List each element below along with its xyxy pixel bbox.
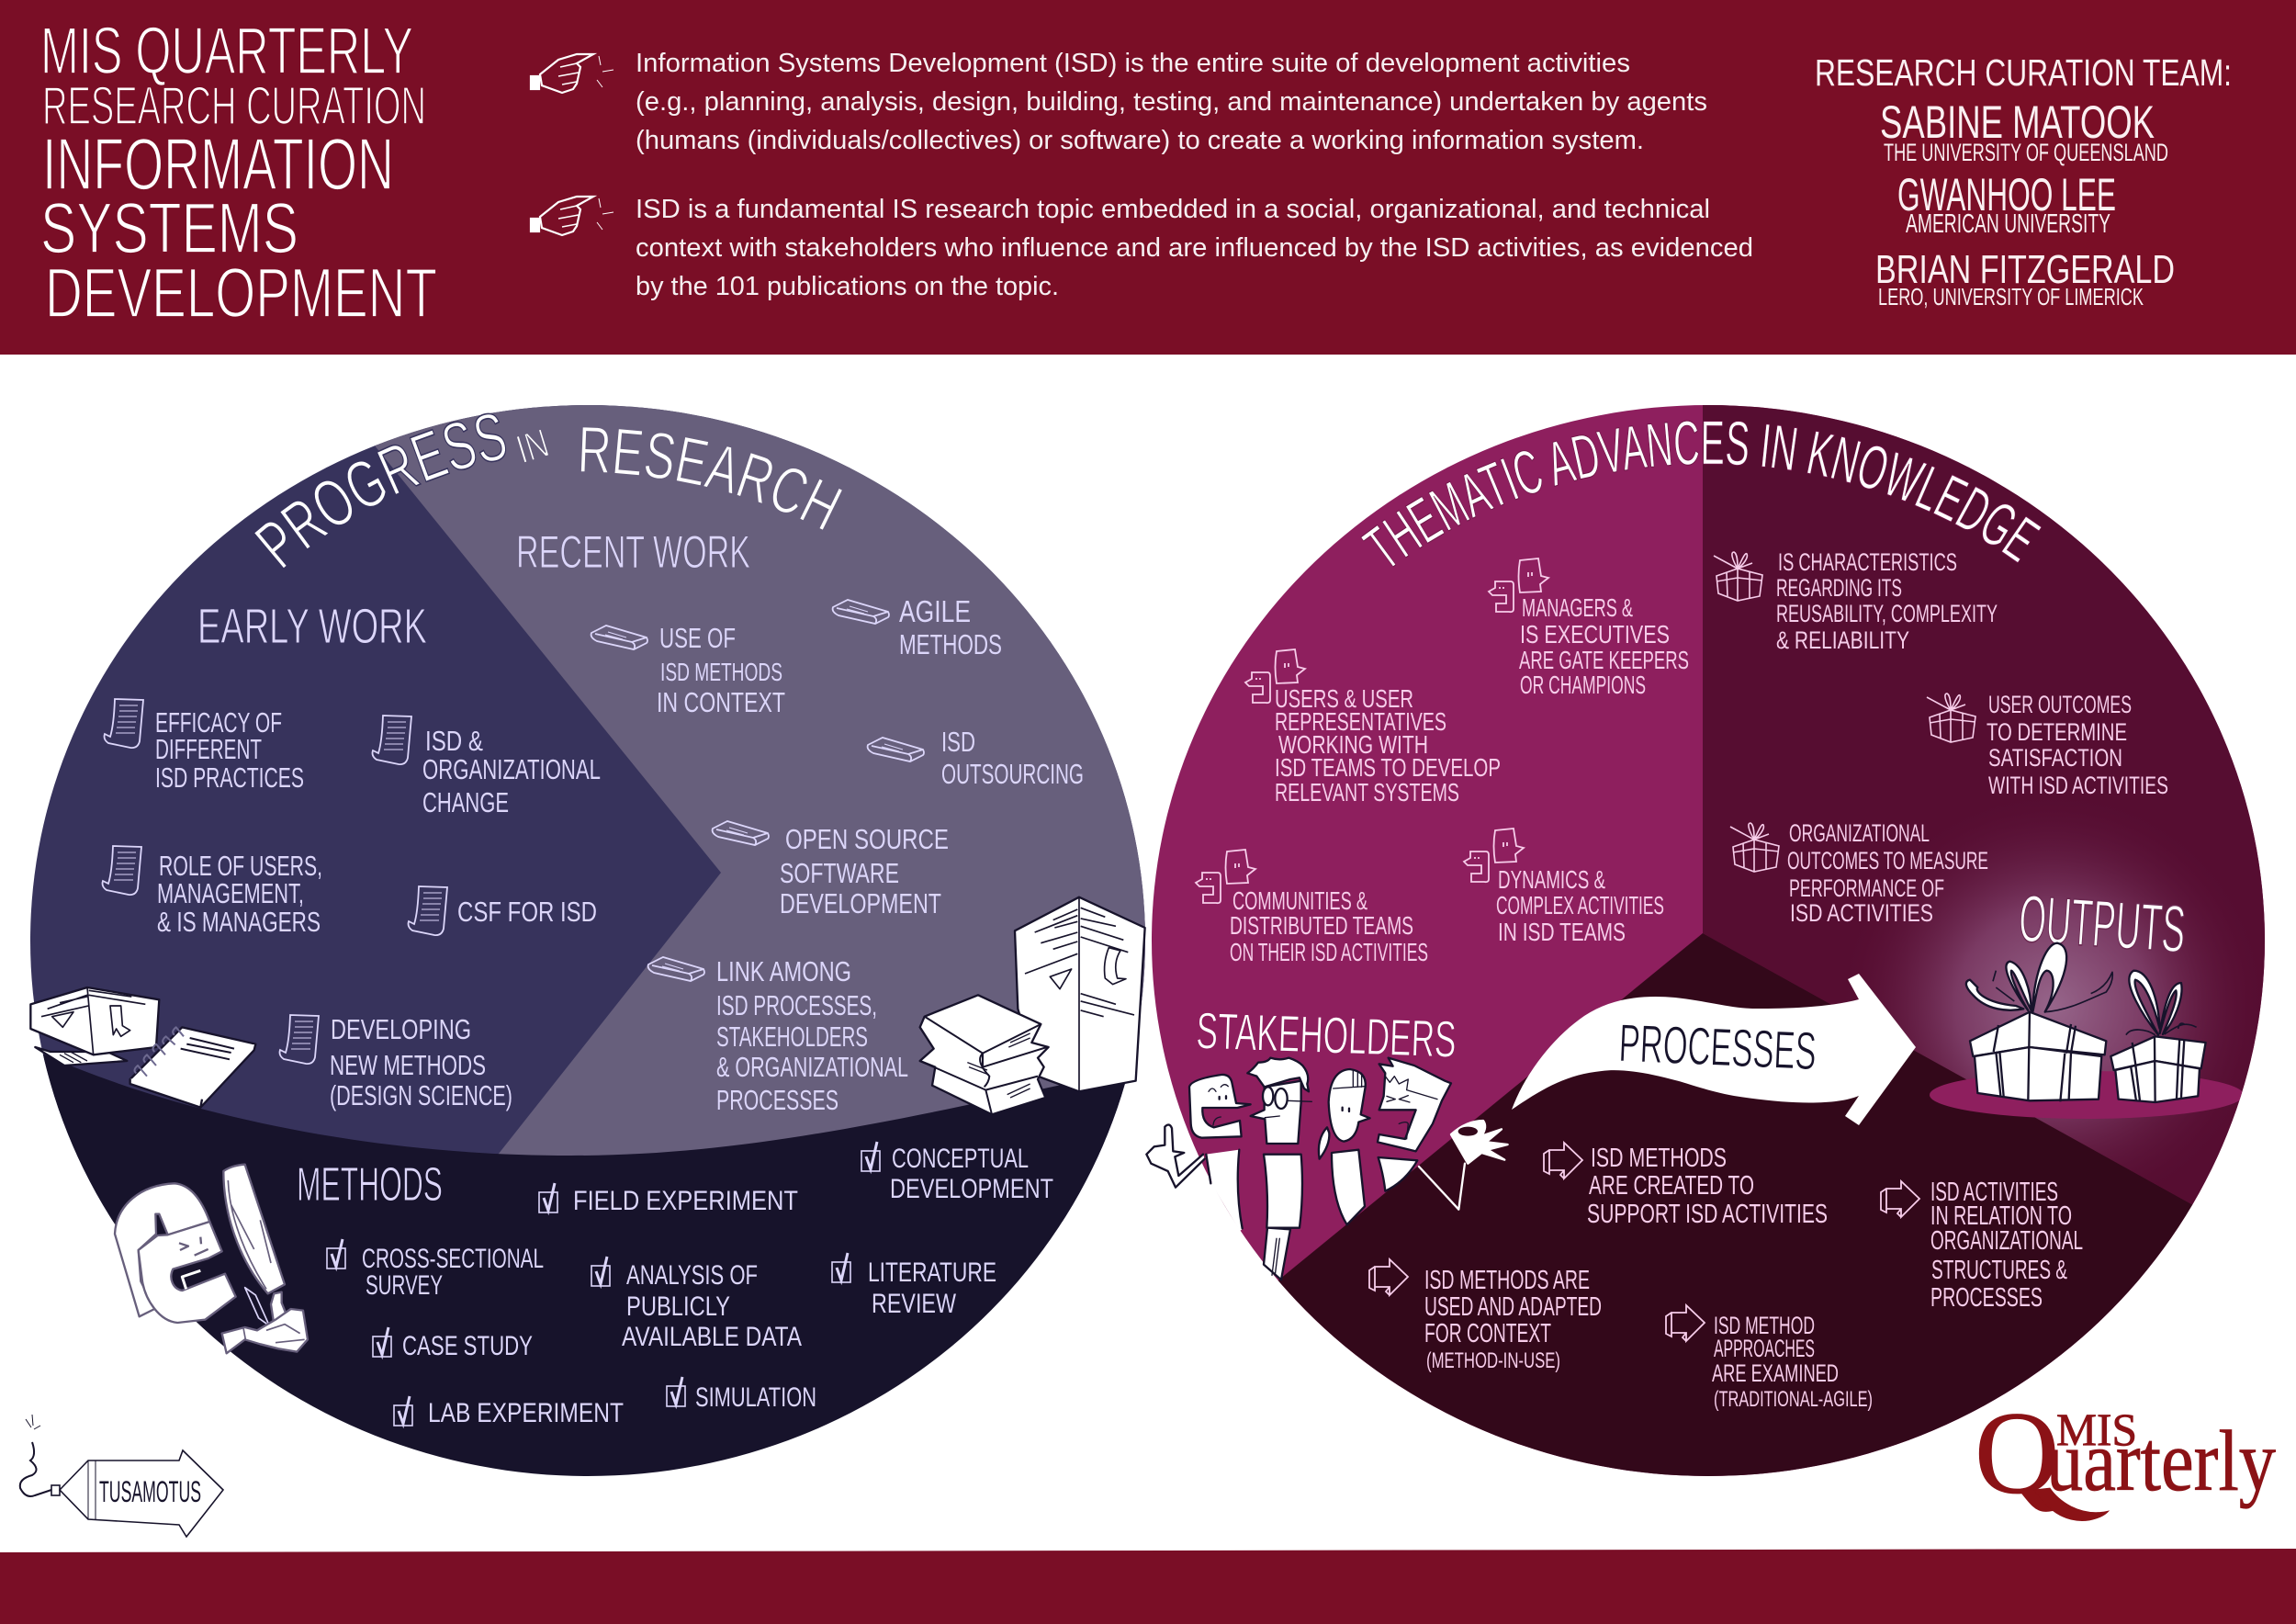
research curation team: LERO, UNIVERSITY OF LIMERICK	[1878, 283, 2144, 310]
logo: mis quarterly	[1975, 1388, 2276, 1521]
method: literature review	[868, 1257, 996, 1319]
item: outsourcing	[941, 726, 1084, 790]
item: efficacy: EFFICACY OF	[155, 706, 282, 739]
item: users: REPRESENTATIVES	[1275, 707, 1446, 736]
research curation team: GWANHOO LEE	[1897, 169, 2116, 220]
item: isd activities	[1930, 1178, 2083, 1313]
title: INFORMATION	[42, 123, 394, 205]
item: user outcomes: WITH ISD ACTIVITIES	[1988, 772, 2168, 799]
method: lab experiment: LAB EXPERIMENT	[428, 1398, 624, 1428]
item: open source: DEVELOPMENT	[780, 887, 941, 919]
item: user outcomes: TO DETERMINE	[1986, 718, 2127, 746]
item: organizational change	[422, 725, 601, 818]
heading: stakeholders: STAKEHOLDERS	[1196, 1001, 1458, 1068]
item: developing new methods: DEVELOPING	[331, 1013, 471, 1045]
item: method approaches: ISD METHOD	[1714, 1312, 1815, 1339]
item: role of users	[157, 850, 322, 938]
method: analysis of public data	[622, 1260, 802, 1352]
icon: checkbox	[861, 1142, 880, 1171]
context paragraph: ISD is a fundamental IS research topic embedded in a social, organizational, and technical	[636, 195, 1710, 224]
outputs glow	[1885, 838, 2221, 1161]
recent work sector	[358, 395, 1157, 1180]
circle heading: progress in research: PROGRESS	[254, 413, 507, 568]
item: organizational change: ISD &	[425, 725, 483, 757]
context paragraph: context with stakeholders who influence and are influenced by the ISD activities, as evidenced	[636, 233, 1753, 263]
item: is characteristics: & RELIABILITY	[1776, 626, 1909, 654]
icon: arrow	[1881, 1181, 1919, 1217]
method: analysis of public data: ANALYSIS OF	[626, 1260, 758, 1291]
item: organizational outcomes: OUTCOMES TO MEASURE	[1787, 847, 1988, 874]
item: dynamics: DYNAMICS &	[1498, 865, 1605, 894]
heading: thematic advances in knowledge: THEMATIC ADVANCES IN KNOWLEDGE	[1360, 421, 2043, 568]
stakeholders sector	[1148, 395, 2278, 1488]
icon: book	[713, 821, 769, 845]
heading: early work: EARLY WORK	[197, 599, 427, 654]
item: isd activities: ORGANIZATIONAL	[1930, 1226, 2083, 1256]
item: developing new methods	[330, 1013, 512, 1111]
item: methods created: ISD METHODS	[1591, 1144, 1727, 1173]
icon: paper	[373, 716, 411, 764]
title	[40, 15, 437, 333]
title: DEVELOPMENT	[45, 254, 437, 333]
item: developing new methods: NEW METHODS	[330, 1049, 486, 1081]
title: RESEARCH CURATION	[42, 76, 426, 136]
illustration: tusamotus tube	[20, 1415, 223, 1537]
item: methods used: ISD METHODS ARE	[1424, 1266, 1590, 1295]
item: method approaches	[1712, 1312, 1873, 1412]
item: organizational outcomes: ISD ACTIVITIES	[1790, 899, 1933, 927]
definition paragraph: Information Systems Development (ISD) is the entire suite of development activities	[636, 49, 1630, 78]
item: role of users: ROLE OF USERS,	[159, 850, 322, 882]
icon: pointing hand 2	[531, 197, 613, 235]
context paragraph: by the 101 publications on the topic.	[636, 272, 1059, 301]
title: SYSTEMS	[40, 187, 298, 268]
item: outsourcing: ISD	[941, 726, 975, 758]
circle heading: progress in research: RESEARCH	[580, 427, 842, 529]
research curation team: BRIAN FITZGERALD	[1875, 247, 2175, 292]
item: methods created: ARE CREATED TO	[1589, 1171, 1754, 1201]
item: isd activities: PROCESSES	[1930, 1283, 2043, 1313]
item: organizational outcomes: ORGANIZATIONAL	[1789, 819, 1930, 847]
item: methods used: (METHOD-IN-USE)	[1426, 1348, 1560, 1373]
process items	[1369, 1143, 2083, 1412]
item: use of isd methods	[657, 622, 785, 718]
icon: book	[868, 738, 924, 761]
icon: paper	[105, 699, 143, 748]
item: isd activities: ISD ACTIVITIES	[1930, 1178, 2058, 1207]
item: outsourcing: OUTSOURCING	[941, 758, 1084, 790]
item: users	[1275, 684, 1501, 806]
item: efficacy: ISD PRACTICES	[155, 761, 304, 794]
heading: recent work: RECENT WORK	[516, 526, 750, 578]
item: user outcomes: SATISFACTION	[1988, 744, 2122, 772]
panel: progress in research circle	[18, 395, 1157, 1488]
method: conceptual development: CONCEPTUAL	[892, 1144, 1029, 1174]
icon: arrow	[1544, 1143, 1582, 1179]
outputs sector	[1703, 395, 2278, 1252]
item: managers: MANAGERS &	[1522, 593, 1633, 622]
item: method approaches: APPROACHES	[1714, 1335, 1815, 1362]
item: isd activities: IN RELATION TO	[1930, 1201, 2072, 1231]
item: communities: COMMUNITIES &	[1232, 886, 1367, 915]
item: methods used: USED AND ADAPTED	[1424, 1292, 1602, 1322]
method: analysis of public data: AVAILABLE DATA	[622, 1322, 802, 1352]
icon: people	[1464, 829, 1524, 882]
icon: people	[1196, 850, 1255, 903]
early work items	[103, 699, 601, 1111]
item: agile methods: AGILE	[899, 594, 971, 628]
method: cross-sectional survey	[362, 1244, 544, 1301]
icon: paper	[279, 1015, 319, 1064]
item: developing new methods: (DESIGN SCIENCE)	[330, 1079, 512, 1111]
item: communities	[1230, 886, 1428, 966]
icon: people	[1489, 558, 1548, 612]
methods sector	[18, 1047, 1157, 1488]
icon: checkbox	[539, 1183, 557, 1212]
item: agile methods: METHODS	[899, 628, 1002, 660]
stakeholder items	[1196, 558, 1689, 966]
item: use of isd methods: IN CONTEXT	[657, 686, 785, 718]
item: users: WORKING WITH	[1278, 730, 1428, 759]
logo: mis quarterly: Q	[1975, 1388, 2059, 1518]
icon: paper	[408, 886, 447, 935]
item: use of isd methods: ISD METHODS	[660, 658, 782, 686]
item: managers: OR CHAMPIONS	[1520, 671, 1646, 699]
header band	[0, 0, 2296, 355]
processes sector	[1278, 933, 2193, 1476]
item: efficacy	[155, 706, 304, 794]
icon: checkbox	[394, 1396, 412, 1426]
recent work items	[591, 594, 1084, 1116]
item: communities: ON THEIR ISD ACTIVITIES	[1230, 938, 1428, 966]
definition paragraph: (e.g., planning, analysis, design, building, testing, and maintenance) undertaken by agents	[636, 87, 1707, 117]
item: user outcomes: USER OUTCOMES	[1988, 691, 2132, 718]
icon: checkbox	[832, 1253, 850, 1282]
research curation team	[1815, 51, 2232, 310]
icon: book	[648, 957, 704, 981]
icon: arrow	[1369, 1259, 1408, 1295]
method: conceptual development: DEVELOPMENT	[890, 1174, 1053, 1204]
research curation team: AMERICAN UNIVERSITY	[1906, 209, 2110, 239]
item: dynamics: COMPLEX ACTIVITIES	[1496, 891, 1664, 919]
item: role of users: MANAGEMENT,	[157, 877, 304, 909]
icon: book	[833, 600, 889, 624]
item: open source: SOFTWARE	[780, 857, 899, 889]
icon: gift	[1714, 552, 1762, 601]
illustration: gifts	[1966, 943, 2206, 1102]
definition paragraph: (humans (individuals/collectives) or software) to create a working information system.	[636, 126, 1644, 155]
item: organizational change: ORGANIZATIONAL	[422, 753, 601, 785]
research curation team: THE UNIVERSITY OF QUEENSLAND	[1884, 139, 2168, 166]
icon: checkbox	[373, 1327, 391, 1357]
icon: checkbox	[667, 1377, 685, 1406]
illustration: person with magnifying glass	[115, 1165, 308, 1353]
icon: people	[1245, 649, 1305, 703]
item: role of users: & IS MANAGERS	[157, 906, 321, 938]
panel: thematic advances circle	[1148, 395, 2278, 1488]
icon: paper	[103, 846, 141, 895]
item: isd activities: STRUCTURES &	[1931, 1256, 2067, 1285]
item: method approaches: ARE EXAMINED	[1712, 1359, 1839, 1387]
icon: pointing hand 1	[531, 54, 613, 93]
item: is characteristics: IS CHARACTERISTICS	[1778, 548, 1957, 576]
illustration: open book and notebook	[30, 987, 255, 1108]
item: efficacy: DIFFERENT	[155, 733, 262, 765]
icon: gift	[1730, 823, 1779, 872]
item: users: USERS & USER	[1275, 684, 1413, 713]
item: managers: ARE GATE KEEPERS	[1519, 646, 1689, 674]
circle heading: progress in research	[254, 413, 842, 568]
circle heading: progress in research: IN	[517, 430, 548, 463]
item: organizational change: CHANGE	[422, 786, 509, 818]
item: agile methods	[899, 594, 1002, 660]
item: is characteristics: REUSABILITY, COMPLEXITY	[1776, 600, 1998, 627]
icon: arrow	[1666, 1305, 1705, 1341]
icon: gift	[1927, 694, 1975, 742]
item: csf: CSF FOR ISD	[457, 896, 597, 928]
arrow: processes	[1512, 974, 1916, 1125]
item: methods created: SUPPORT ISD ACTIVITIES	[1587, 1200, 1828, 1229]
method: field experiment: FIELD EXPERIMENT	[573, 1186, 798, 1216]
item: methods used: FOR CONTEXT	[1424, 1319, 1551, 1348]
item: managers: IS EXECUTIVES	[1520, 620, 1670, 648]
method: conceptual development	[890, 1144, 1053, 1204]
item: managers	[1519, 593, 1689, 699]
item: organizational outcomes	[1787, 819, 1988, 927]
output items	[1714, 548, 2168, 927]
title: MIS QUARTERLY	[40, 15, 413, 88]
tube label: TUSAMOTUS	[99, 1475, 201, 1508]
method: cross-sectional survey: CROSS-SECTIONAL	[362, 1244, 544, 1274]
logo: mis quarterly: MIS	[2056, 1404, 2137, 1455]
illustration: tall book and book stack	[920, 897, 1145, 1114]
icon: checkbox	[591, 1257, 610, 1286]
method: simulation: SIMULATION	[695, 1382, 816, 1413]
item: dynamics: IN ISD TEAMS	[1498, 918, 1626, 946]
definition paragraph	[636, 49, 1707, 155]
context paragraph	[636, 195, 1753, 301]
item: link among: PROCESSES	[716, 1084, 838, 1116]
illustration: stakeholder figures	[1146, 1058, 1508, 1280]
item: link among: & ORGANIZATIONAL	[716, 1051, 908, 1083]
item: open source: OPEN SOURCE	[785, 823, 949, 855]
item: communities: DISTRIBUTED TEAMS	[1230, 911, 1413, 940]
early work sector	[18, 395, 1157, 1222]
item: is characteristics: REGARDING ITS	[1776, 574, 1902, 602]
item: method approaches: (TRADITIONAL-AGILE)	[1714, 1387, 1873, 1412]
item: users: ISD TEAMS TO DEVELOP	[1275, 753, 1501, 782]
icon: book	[591, 626, 647, 649]
method: cross-sectional survey: SURVEY	[366, 1270, 443, 1301]
item: link among: STAKEHOLDERS	[716, 1021, 868, 1053]
item: open source	[780, 823, 949, 919]
item: link among	[716, 955, 908, 1116]
item: methods created	[1587, 1144, 1828, 1229]
footer band	[0, 1549, 2296, 1624]
research curation team: SABINE MATOOK	[1880, 96, 2155, 148]
item: users: RELEVANT SYSTEMS	[1275, 778, 1459, 806]
outputs plate	[1930, 1071, 2244, 1119]
item: use of isd methods: USE OF	[659, 622, 736, 654]
arrow label: PROCESSES	[1617, 1013, 1818, 1081]
item: dynamics	[1496, 865, 1664, 946]
method: analysis of public data: PUBLICLY	[626, 1291, 730, 1322]
method: case study: CASE STUDY	[402, 1331, 533, 1361]
item: is characteristics	[1776, 548, 1998, 654]
methods heading: METHODS	[297, 1158, 443, 1212]
item: methods used	[1424, 1266, 1602, 1373]
icon: checkbox	[327, 1239, 345, 1269]
method: literature review: REVIEW	[872, 1289, 957, 1319]
method: literature review: LITERATURE	[868, 1257, 996, 1288]
item: user outcomes	[1986, 691, 2168, 799]
methods checklist	[327, 1142, 1053, 1428]
item: organizational outcomes: PERFORMANCE OF	[1789, 874, 1944, 902]
item: link among: LINK AMONG	[716, 955, 851, 987]
item: link among: ISD PROCESSES,	[716, 989, 877, 1021]
